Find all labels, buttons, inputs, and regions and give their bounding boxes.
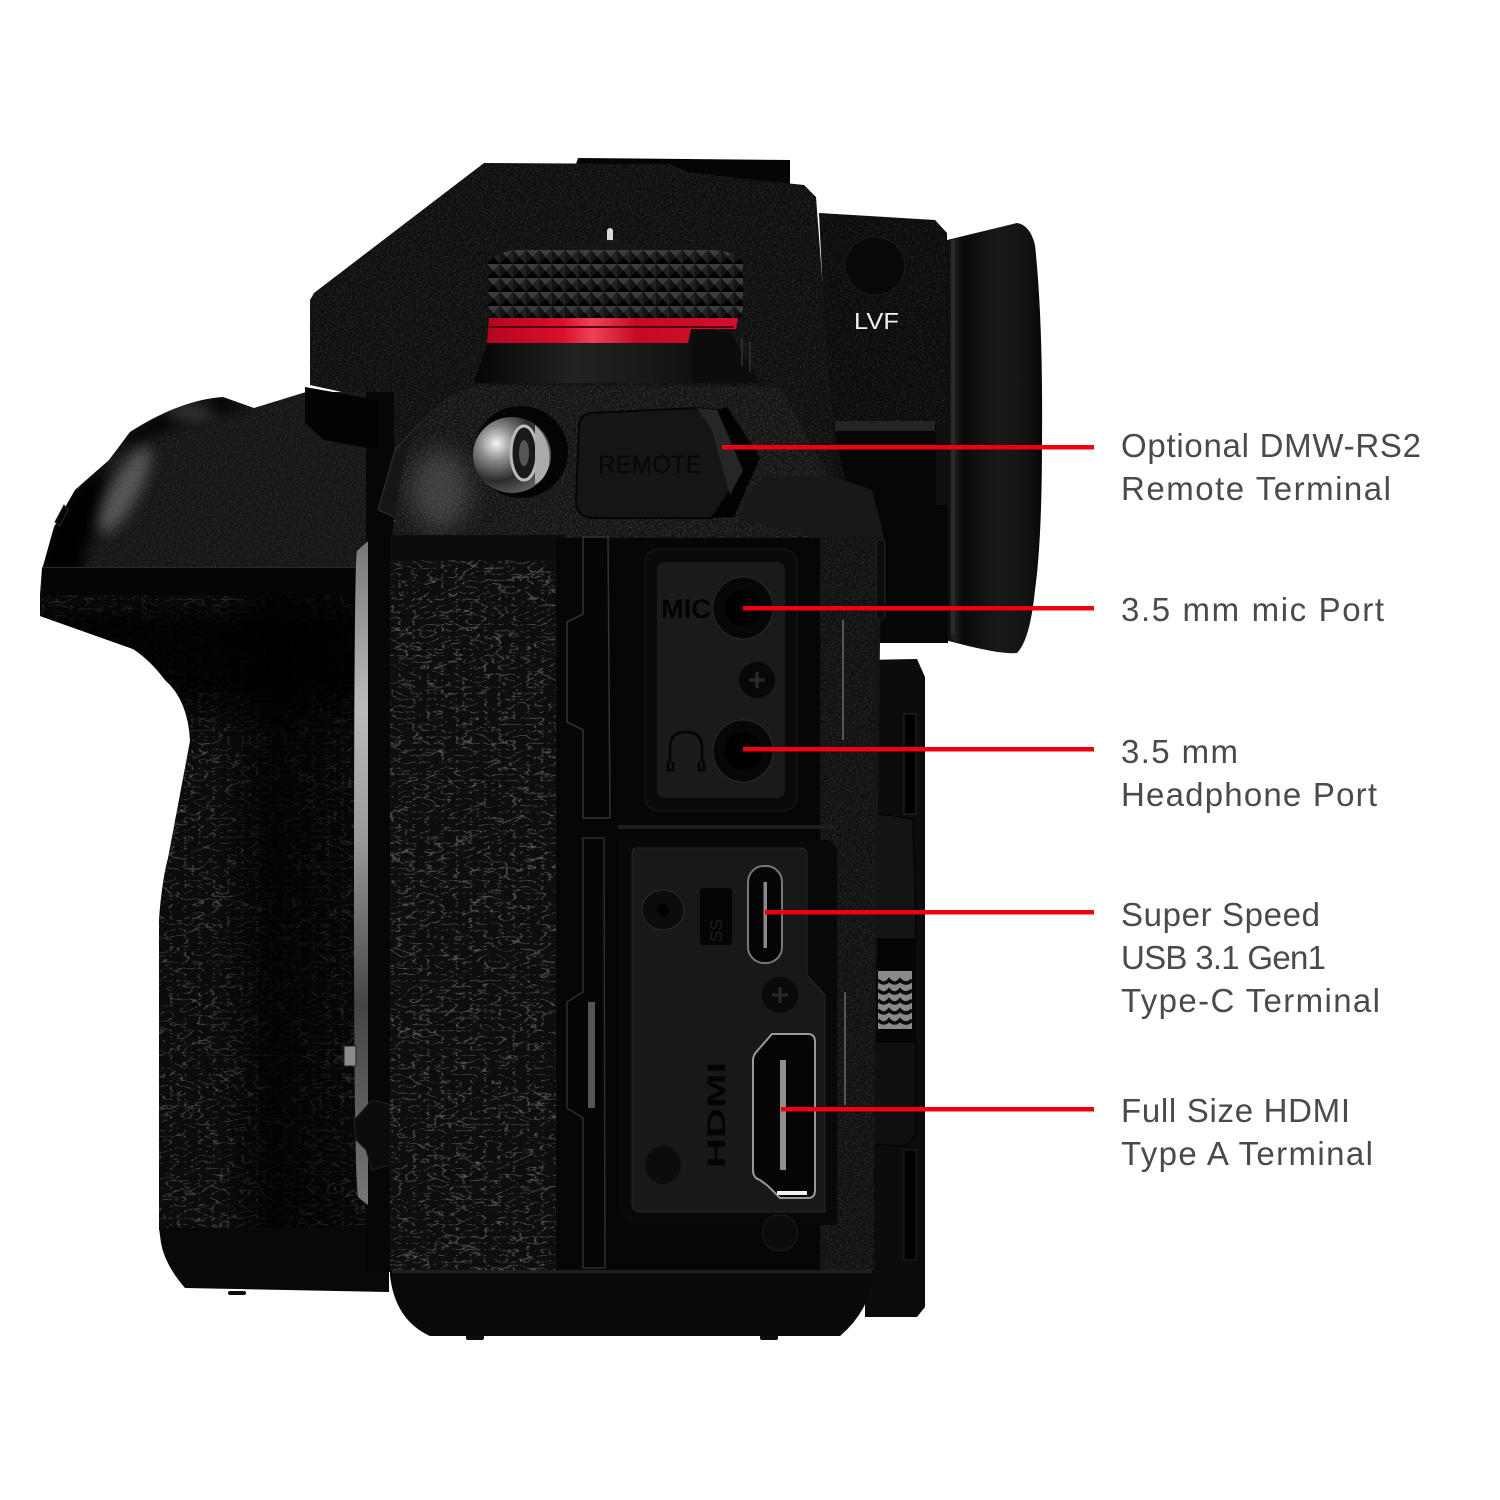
hump side shade [305,387,378,450]
red ring [487,318,738,343]
leader line [722,445,1094,450]
body leather [390,560,556,1270]
grip base [159,1228,389,1292]
label: Super Speed [1121,896,1320,933]
leader line [743,747,1094,752]
USB logo [700,888,732,945]
MIC label: MIC [661,594,711,624]
callout: USB terminal [765,896,1380,1019]
camera body illustration [30,158,1042,1340]
label: Type-C Terminal [1121,982,1380,1019]
door hinge lower [567,838,605,1268]
label: Optional DMW-RS2 [1121,427,1421,464]
upper terminal plate [645,549,797,811]
headphone icon [668,732,704,770]
main body [390,385,885,1336]
plate screw lower [762,977,798,1013]
label: 3.5 mm mic Port [1121,591,1384,628]
knurled slider [878,971,912,1029]
body band [390,535,565,561]
REMOTE label: REMOTE [598,451,702,479]
leader line [743,606,1094,610]
hot shoe [576,158,790,184]
callout: HDMI terminal [781,1092,1373,1172]
callout: headphone port [743,733,1377,813]
HDMI port [753,1034,815,1198]
label: 3.5 mm [1121,733,1238,770]
shoulder texture [392,385,827,537]
viewfinder housing [815,210,950,646]
mic jack [713,577,773,639]
viewfinder hump [305,160,840,525]
lens lock pin [354,1100,402,1170]
strap lug [473,406,568,498]
callout: mic port [743,591,1384,628]
plate screw [739,662,775,698]
small hole [642,890,684,930]
terminal bay [556,537,845,1270]
body base [390,1270,874,1336]
tripod feet [228,1291,778,1340]
side knob [876,540,885,620]
leader line [765,910,1094,914]
LVF label: LVF [854,308,899,334]
shoulder ridge [738,458,884,537]
mode dial [474,228,760,383]
viewfinder dioptre wheel [936,425,949,505]
leader line [781,1107,1094,1112]
USB logo: SS [707,919,726,942]
USB-C port [748,866,782,963]
label: Remote Terminal [1121,470,1391,507]
lens mount edge [344,392,402,1272]
grip top plate [30,390,370,575]
callout: remote terminal [722,427,1421,507]
body side strip [818,540,874,1275]
remote terminal door [576,407,760,518]
bottom hole [645,1146,681,1184]
door hinge upper [567,537,610,818]
eyecup [945,223,1042,653]
grip leather [40,566,366,1230]
headphone jack [713,720,773,782]
label: Type A Terminal [1121,1135,1373,1172]
label: Full Size HDMI [1121,1092,1350,1129]
rear LCD monitor [865,659,925,1317]
HDMI label: HDMI [703,1062,731,1168]
label: Headphone Port [1121,776,1377,813]
lower terminal plate [618,840,837,1251]
LVF button [845,237,905,295]
label: USB 3.1 Gen1 [1121,939,1326,976]
control button block [866,813,916,1146]
side slots [843,620,845,1105]
dial collar [474,329,760,383]
front control wheel [378,423,428,517]
